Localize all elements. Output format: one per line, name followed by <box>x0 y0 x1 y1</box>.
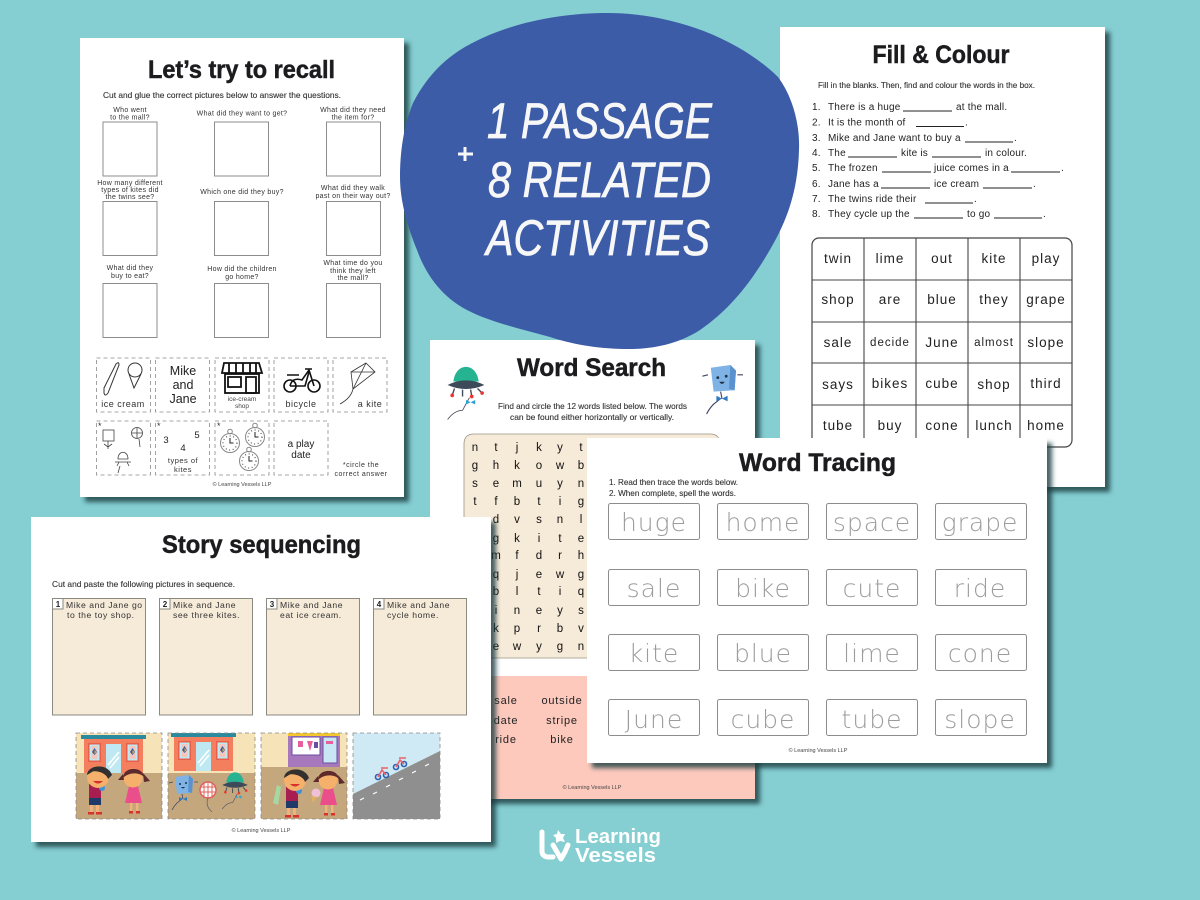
picture: three kites <box>168 733 255 819</box>
logo: Learning Vessels <box>542 826 661 867</box>
word grid: June <box>925 335 959 350</box>
cut-out cards: * <box>98 421 102 431</box>
word list panel: stripe <box>546 715 578 727</box>
tracing word boxes: kite <box>629 639 679 668</box>
panel: Fill and Colour worksheet <box>780 27 1105 487</box>
questions: buy to eat? <box>111 273 149 280</box>
questions: What time do you <box>323 260 383 267</box>
logo: Learning Vessels: Vessels <box>575 845 656 867</box>
instruction text: Fill in the blanks. Then, find and colour the words in the box. <box>818 81 1035 90</box>
instruction text: Cut and glue the correct pictures below to answer the questions. <box>103 91 341 100</box>
icon: LV monogram <box>542 830 568 859</box>
word grid <box>812 238 1072 447</box>
word grid: buy <box>878 418 902 433</box>
sequence step boxes <box>52 598 466 715</box>
instruction text <box>609 478 738 498</box>
word grid: lunch <box>975 418 1013 433</box>
word grid: grape <box>1026 292 1066 307</box>
fill in the blanks sentences: . <box>1014 133 1017 144</box>
cut-out cards: shop <box>235 403 249 410</box>
fill in the blanks sentences: 2. <box>812 118 821 128</box>
tracing word boxes: cube <box>731 705 795 734</box>
questions: the item for? <box>332 114 374 122</box>
word grid: says <box>822 377 854 392</box>
fill in the blanks sentences: 8. <box>812 209 821 220</box>
sequence step boxes: see three kites. <box>173 610 240 620</box>
heading: Story sequencing: Story sequencing <box>162 531 361 559</box>
word grid: shop <box>821 292 855 307</box>
heading: Word Search: Word Search <box>517 354 666 382</box>
panel: Word Search worksheet <box>430 340 755 799</box>
questions: What did they need <box>320 107 386 114</box>
word grid: bikes <box>872 376 908 391</box>
sequence step boxes: eat ice cream. <box>280 610 342 620</box>
word grid: are <box>879 292 901 307</box>
word list panel: sale <box>494 695 518 707</box>
icon: blue cube kite <box>702 365 743 414</box>
fill in the blanks sentences: in colour. <box>985 148 1027 159</box>
word list panel <box>430 676 755 799</box>
questions: How many different <box>97 180 163 187</box>
word list panel: bike <box>550 734 574 746</box>
word grid: play <box>1032 251 1060 266</box>
cut-out cards: ice cream <box>101 399 145 409</box>
letter grid: qjewg <box>493 569 584 581</box>
letter grid: ghkowb <box>472 460 584 472</box>
icon: clocks <box>220 423 264 470</box>
icon: bicycle <box>284 369 320 392</box>
tracing word boxes: blue <box>734 639 792 668</box>
heading: Let's try to recall: Let’s try to recall <box>148 56 335 84</box>
word list panel: ride <box>495 734 517 746</box>
headline text: ACTIVITIES <box>484 210 710 266</box>
plus sign <box>458 147 473 161</box>
cut-out cards <box>96 358 388 478</box>
cut-out cards: *circle the <box>343 462 379 469</box>
copyright: © Learning Vessels LLP <box>789 747 848 754</box>
copyright: © Learning Vessels LLP <box>232 827 291 834</box>
headline text: 8 RELATED <box>488 152 711 208</box>
fill in the blanks sentences: There is a huge <box>828 102 901 113</box>
fill in the blanks sentences: at the mall. <box>956 102 1007 113</box>
picture: twins eat ice cream <box>261 733 347 819</box>
cut-out cards: kites <box>174 465 192 474</box>
sequence step boxes: 4 <box>377 600 382 609</box>
tracing word boxes: cute <box>843 574 901 603</box>
word grid: twin <box>824 251 852 266</box>
cut-out cards: 4 <box>180 443 186 454</box>
letter grid <box>464 434 720 658</box>
fill in the blanks sentences: to go <box>967 209 990 220</box>
letter grid: dvsnl <box>493 514 582 526</box>
word list panel: outside <box>541 695 583 707</box>
logo wordmark: Learning <box>575 826 661 848</box>
questions: What did they want to get? <box>197 110 287 118</box>
copyright: © Learning Vessels LLP <box>213 481 272 488</box>
sequence step boxes: Mike and Jane <box>280 600 343 610</box>
questions: Which one did they buy? <box>200 189 284 196</box>
headline text: 1 PASSAGE <box>487 93 713 149</box>
letter grid: bltiq <box>493 586 584 598</box>
tracing word boxes: tube <box>842 705 902 734</box>
cut-out cards: types of <box>168 456 199 465</box>
icon: ice cream <box>104 363 142 395</box>
sequence step boxes: Mike and Jane <box>173 600 236 610</box>
questions <box>97 107 391 282</box>
sequence step boxes: 3 <box>270 600 275 609</box>
letter grid: semuyn <box>472 478 584 490</box>
questions: the twins see? <box>106 194 154 201</box>
tracing word boxes: June <box>625 705 683 734</box>
icon: kite <box>340 363 375 404</box>
questions: the mall? <box>337 275 369 282</box>
word grid: shop <box>977 377 1011 392</box>
cut-out cards: a kite <box>358 399 382 409</box>
cut-out cards: and <box>173 378 193 392</box>
word grid: lime <box>876 251 904 266</box>
letter grid: ewygn <box>493 641 584 653</box>
panel: Let's try to recall worksheet <box>80 38 404 497</box>
word grid: cone <box>925 418 959 433</box>
cut-out cards: correct answer <box>335 471 388 478</box>
picture: twins at the toy shop <box>76 733 162 819</box>
fill in the blanks sentences: kite is <box>901 148 928 159</box>
tracing word boxes <box>608 504 1026 736</box>
cut-out cards: Mike <box>170 364 196 378</box>
sequence step boxes: 1 <box>56 600 61 609</box>
letter grid: ntjkyt <box>472 442 583 454</box>
icon: ice-cream shop <box>222 363 262 393</box>
fill in the blanks sentences: 6. <box>812 179 821 190</box>
instruction text: 2. When complete, spell the words. <box>609 489 736 498</box>
questions: What did they <box>107 265 154 272</box>
questions: What did they walk <box>321 185 385 192</box>
fill in the blanks sentences: 4. <box>812 148 821 159</box>
fill in the blanks sentences: It is the month of <box>828 118 906 128</box>
questions: go home? <box>225 274 259 281</box>
panel: Word Tracing worksheet <box>587 438 1047 763</box>
letter grid: gkite <box>493 533 584 545</box>
cut-out cards: ice-cream <box>228 396 256 403</box>
answer boxes <box>103 122 380 338</box>
fill in the blanks sentences: . <box>974 194 977 205</box>
icon: UFO kite <box>448 367 484 420</box>
picture: twins cycle home <box>353 733 440 819</box>
fill in the blanks sentences: juice comes in a <box>933 163 1009 174</box>
fill in the blanks sentences: . <box>1061 163 1064 174</box>
fill in the blanks sentences: The frozen <box>828 163 878 174</box>
fill in the blanks sentences: . <box>965 118 968 128</box>
cut-out cards: Jane <box>169 392 197 406</box>
fill in the blanks sentences: 7. <box>812 194 821 205</box>
letter grid: mfdrh <box>491 550 584 562</box>
fill in the blanks sentences: 3. <box>812 133 821 144</box>
callout: blue blob with headline <box>400 13 799 349</box>
tracing word boxes: grape <box>942 508 1018 537</box>
sequence step boxes: cycle home. <box>387 610 439 620</box>
panel: Story sequencing worksheet <box>31 517 491 842</box>
questions: to the mall? <box>110 114 150 122</box>
questions: Who went <box>113 107 147 114</box>
fill in the blanks sentences <box>812 102 1064 220</box>
fill in the blanks sentences: They cycle up the <box>828 209 910 220</box>
tracing word boxes: sale <box>627 574 681 603</box>
fill in the blanks sentences: Mike and Jane want to buy a <box>828 133 961 144</box>
word grid: third <box>1030 376 1062 391</box>
tracing word boxes: space <box>833 508 911 537</box>
cut-out cards: * <box>217 421 221 431</box>
sequence step boxes: to the toy shop. <box>67 610 135 620</box>
tracing word boxes: lime <box>843 639 901 668</box>
icon: three kites <box>103 428 142 473</box>
fill in the blanks sentences: The <box>828 148 846 159</box>
sequence step boxes: Mike and Jane <box>387 600 450 610</box>
letter grid: tfbtig <box>473 496 584 508</box>
instruction text: Find and circle the 12 words listed below. The words <box>498 402 687 411</box>
copyright: © Learning Vessels LLP <box>563 784 622 791</box>
questions: types of kites did <box>101 187 159 194</box>
letter grid: ineys <box>495 605 584 617</box>
fill in the blanks sentences: 5. <box>812 163 821 174</box>
letter grid: kprbv <box>493 623 584 635</box>
fill in the blanks sentences: The twins ride their <box>828 194 917 205</box>
questions: How did the children <box>207 266 277 273</box>
fill in the blanks sentences: 1. <box>812 102 821 113</box>
word grid: almost <box>974 337 1014 349</box>
word grid: slope <box>1027 335 1065 350</box>
tracing word boxes: cone <box>948 639 1012 668</box>
panel: Word Search worksheet: can be found either horizontally or vertically. <box>510 413 674 422</box>
questions: think they left <box>330 268 376 275</box>
fill in the blanks sentences: Jane has a <box>828 179 879 190</box>
cut-out cards: date <box>291 450 311 461</box>
tracing word boxes: home <box>726 508 800 537</box>
sequence step boxes: 2 <box>163 600 168 609</box>
word list panel: date <box>494 715 518 727</box>
tracing word boxes: ride <box>954 574 1006 603</box>
cut-out cards: * <box>157 421 161 431</box>
cut-out cards: bicycle <box>285 399 317 409</box>
word grid: cube <box>925 376 959 391</box>
tracing word boxes: slope <box>944 705 1016 734</box>
fill in the blanks sentences: . <box>1033 179 1036 190</box>
word grid: blue <box>927 292 957 307</box>
word grid: out <box>931 251 953 266</box>
fill in the blanks sentences: . <box>1043 209 1046 220</box>
word grid: sale <box>824 335 852 350</box>
word grid: they <box>979 292 1009 307</box>
word grid: kite <box>981 251 1007 266</box>
heading: Word Tracing: Word Tracing <box>739 449 896 477</box>
word grid: decide <box>870 337 910 349</box>
instruction text: Cut and paste the following pictures in sequence. <box>52 580 235 589</box>
tracing word boxes: huge <box>621 508 687 537</box>
heading: Fill & Colour: Fill & Colour <box>872 41 1010 69</box>
cut-out cards: 5 <box>194 430 200 441</box>
cut-out cards: a play <box>288 439 314 450</box>
instruction text: 1. Read then trace the words below. <box>609 478 738 487</box>
questions: past on their way out? <box>315 193 391 200</box>
word grid: tube <box>823 418 853 433</box>
cut-out cards: 3 <box>163 435 169 446</box>
tracing word boxes: bike <box>735 574 791 603</box>
fill in the blanks sentences: ice cream <box>934 179 979 190</box>
sequence step boxes: Mike and Jane go <box>66 600 143 610</box>
word grid: home <box>1027 418 1065 433</box>
headline text <box>484 93 713 266</box>
